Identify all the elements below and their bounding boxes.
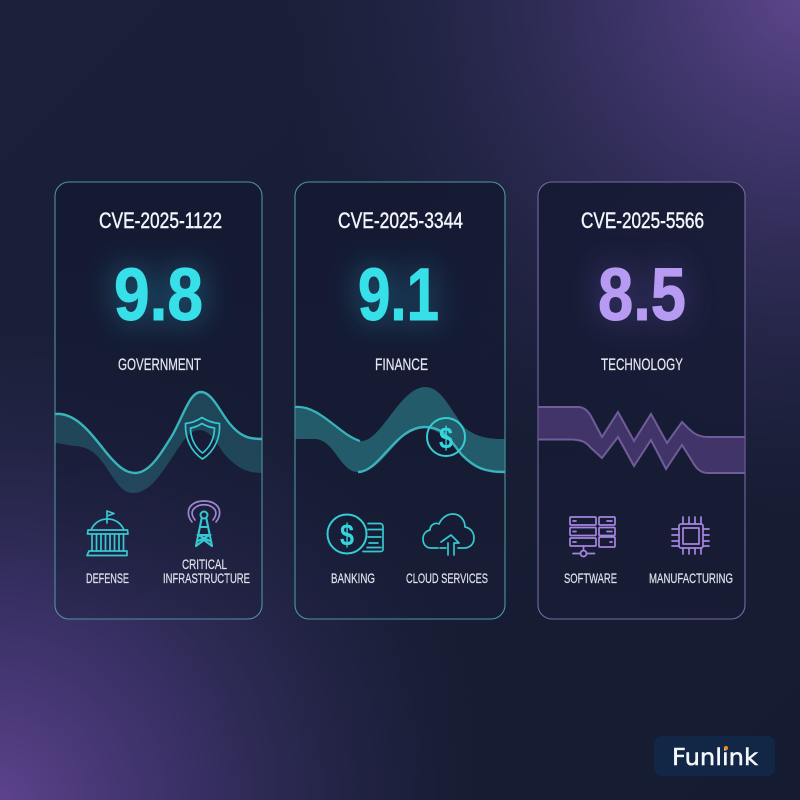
CVE heading 3: CVE-2025-5566 — [581, 208, 704, 233]
icon: dollar coin: $ — [439, 420, 453, 455]
label: cloud services: CLOUD SERVICES — [406, 570, 488, 586]
logo: Funlink — [654, 736, 775, 776]
icon: banking — [328, 514, 383, 554]
score 9.1: 9.1 — [358, 253, 439, 336]
icon: shield — [185, 418, 220, 459]
CVE heading 2: CVE-2025-3344 — [338, 208, 463, 233]
icon: radio tower — [188, 501, 220, 546]
score 8.5: 8.5 — [598, 253, 686, 336]
icon: dollar coin — [427, 418, 465, 456]
label: manufacturing: MANUFACTURING — [649, 570, 733, 586]
panel: finance card — [295, 182, 505, 619]
score 9.1: 9.1 — [358, 253, 439, 336]
wave chart 1 — [55, 392, 262, 493]
label: critical infrastructure — [163, 556, 250, 586]
label: defense: DEFENSE — [86, 570, 129, 586]
label: critical infrastructure: CRITICAL — [182, 556, 227, 572]
wave chart 2 — [295, 387, 505, 472]
sector: government: GOVERNMENT — [118, 355, 201, 374]
label: critical infrastructure: INFRASTRUCTURE — [163, 570, 250, 586]
icon: cloud upload — [423, 514, 474, 555]
CVE heading 1: CVE-2025-1122 — [99, 208, 222, 233]
logo: Funlink: Funlink — [672, 745, 759, 771]
icon: microchip — [672, 517, 709, 554]
score 9.8: 9.8 — [114, 253, 203, 336]
label: banking: BANKING — [331, 570, 375, 586]
wave chart 3 — [538, 407, 745, 473]
score 8.5: 8.5 — [598, 253, 686, 336]
sector: technology: TECHNOLOGY — [601, 355, 683, 374]
icon: banking: $ — [340, 517, 354, 552]
score 9.8: 9.8 — [114, 253, 203, 336]
panel: government card — [55, 182, 262, 619]
panel: technology card — [538, 182, 745, 619]
icon: government building — [87, 511, 128, 556]
icon: server rack — [570, 517, 615, 556]
sector: finance: FINANCE — [375, 355, 428, 374]
label: software: SOFTWARE — [564, 570, 617, 586]
